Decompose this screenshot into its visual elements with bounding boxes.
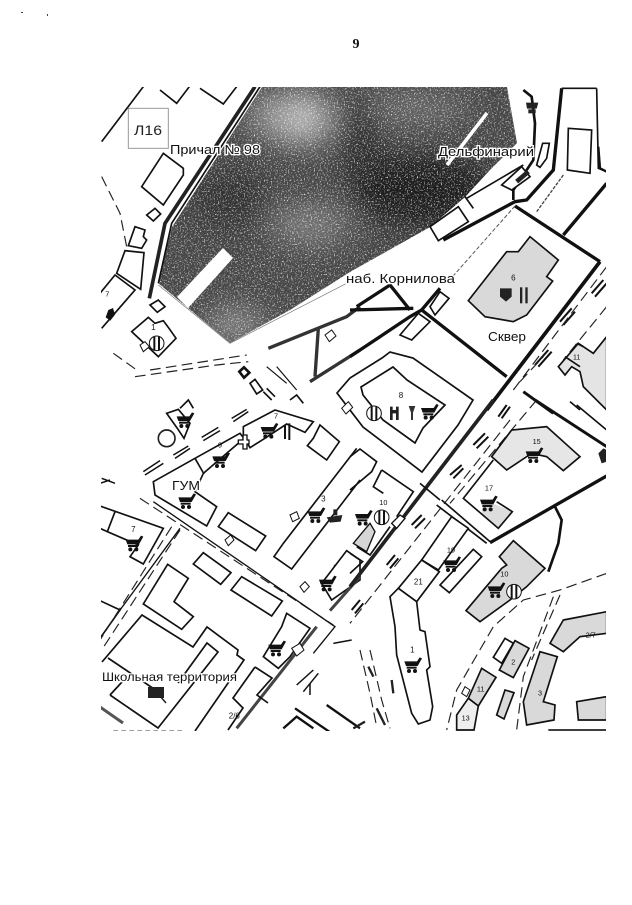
school territory buildings — [100, 615, 272, 731]
icon: cart — [178, 493, 196, 509]
icon: house number 2 marker — [292, 643, 304, 656]
building polygons — [100, 153, 183, 357]
building 10 east: 10 — [500, 570, 508, 579]
icon: cart — [355, 510, 373, 526]
scan specks — [21, 12, 48, 16]
buildings — [100, 409, 360, 668]
icon: restaurant — [520, 287, 522, 303]
buildings 19, 21, 1: 21 — [414, 577, 423, 586]
icons on building 8 — [367, 404, 439, 421]
small markers — [225, 402, 353, 592]
icon: theatre masks — [500, 288, 512, 302]
icon: gear at road end — [598, 448, 607, 463]
icon: cart — [261, 423, 278, 439]
icon: museum — [392, 515, 405, 528]
building labels: 12 — [333, 564, 342, 573]
road hatch marks — [100, 409, 352, 695]
building labels: 14 — [281, 628, 289, 637]
icon: gift shop — [327, 509, 342, 523]
page number: 9 — [352, 37, 360, 52]
avenue dashes — [535, 280, 607, 367]
icon: cart — [480, 496, 498, 511]
house 2/6 — [228, 667, 272, 730]
pier: white strip — [177, 248, 233, 308]
south embankment roads — [237, 577, 360, 728]
northwest map sector: 1 — [151, 323, 156, 332]
southeast small buildings: 13 — [462, 714, 470, 723]
buildings 19, 21, 1: 19 — [447, 546, 455, 555]
label: Причал № 98: Причал № 98 — [170, 142, 260, 157]
icon: cart — [488, 582, 505, 598]
southeast small buildings: 2/7 — [586, 630, 596, 639]
building labels: 9 — [218, 441, 222, 450]
icon: cart Dolphinarium — [526, 103, 538, 113]
building 11 east: 11 — [573, 354, 580, 361]
building 8 — [337, 352, 473, 472]
bottom scan edge — [113, 729, 183, 733]
southeast small buildings: 11 — [477, 685, 484, 694]
icon: cart — [126, 536, 143, 551]
water area: bay — [150, 87, 530, 347]
icon: restaurant at house 1 — [149, 336, 164, 351]
label: Сквер: Сквер — [488, 329, 526, 344]
buildings 10 west, 12 — [350, 449, 413, 573]
building 10 east — [466, 541, 545, 622]
icon: cart — [177, 412, 194, 428]
small circle — [158, 430, 175, 447]
main thick roads — [443, 88, 562, 240]
promenade roads — [268, 307, 360, 382]
building labels: 2/6 — [229, 711, 240, 720]
map sheet frame — [128, 108, 168, 148]
dolphinarium jetty: white strip — [447, 113, 487, 165]
icon: cart — [268, 641, 286, 656]
GUM and house 9 block — [153, 433, 244, 526]
icon: cart — [308, 507, 325, 523]
label: ГУМ: ГУМ — [172, 478, 200, 493]
label: наб. Корнилова: наб. Корнилова — [346, 271, 456, 286]
buildings 10 west, 12: 10 — [379, 498, 387, 507]
building labels: 7 — [131, 525, 136, 534]
northwest map sector — [100, 87, 360, 408]
icon: restaurant — [374, 510, 389, 525]
building 17: 17 — [485, 484, 493, 493]
building 15: 15 — [533, 437, 541, 446]
buildings 19, 21, 1 — [390, 517, 482, 724]
icons: pharmacy cross — [238, 435, 249, 449]
icon: restaurant — [507, 584, 521, 599]
building 11 east — [558, 337, 607, 410]
building labels: 5 — [320, 440, 325, 449]
icon: cart — [404, 657, 422, 673]
building 17 — [463, 460, 512, 528]
southeast small buildings: 3 — [538, 689, 542, 698]
icon: cart — [526, 447, 543, 463]
icon: figures at house 7 — [106, 308, 115, 321]
building labels: 3 — [254, 593, 259, 602]
embankment road — [149, 87, 255, 298]
icon: cart — [443, 556, 461, 572]
label: Л16: Л16 — [134, 122, 162, 138]
building 6 in the square — [468, 237, 558, 322]
house 7 block — [243, 410, 313, 448]
icon: cart — [212, 452, 230, 468]
icon: restaurant — [284, 423, 290, 440]
icon: cart — [319, 576, 337, 591]
building 15 — [492, 427, 580, 471]
map — [100, 87, 607, 733]
label: Школьная территория: Школьная территория — [102, 670, 237, 684]
southeast small buildings — [457, 612, 607, 730]
label: Дельфинарий: Дельфинарий — [438, 144, 534, 159]
southeast map sector — [350, 400, 607, 730]
buildings 19, 21, 1: 1 — [410, 645, 415, 654]
building 6 in the square: 6 — [511, 274, 516, 283]
main avenue — [350, 400, 493, 587]
building labels — [131, 411, 342, 720]
building labels: 7 — [274, 411, 278, 420]
southwest map sector — [100, 402, 360, 733]
building 8: 8 — [399, 391, 404, 400]
southeast small buildings: 2 — [511, 657, 515, 666]
northeast map sector — [350, 88, 607, 413]
Dolphinarium buildings — [400, 128, 592, 340]
building labels: 6 — [238, 528, 243, 537]
icon: school — [148, 687, 164, 698]
building labels: 3 — [321, 495, 326, 504]
southeast dashed roads — [360, 573, 607, 730]
northwest map sector: 7 — [105, 290, 109, 299]
